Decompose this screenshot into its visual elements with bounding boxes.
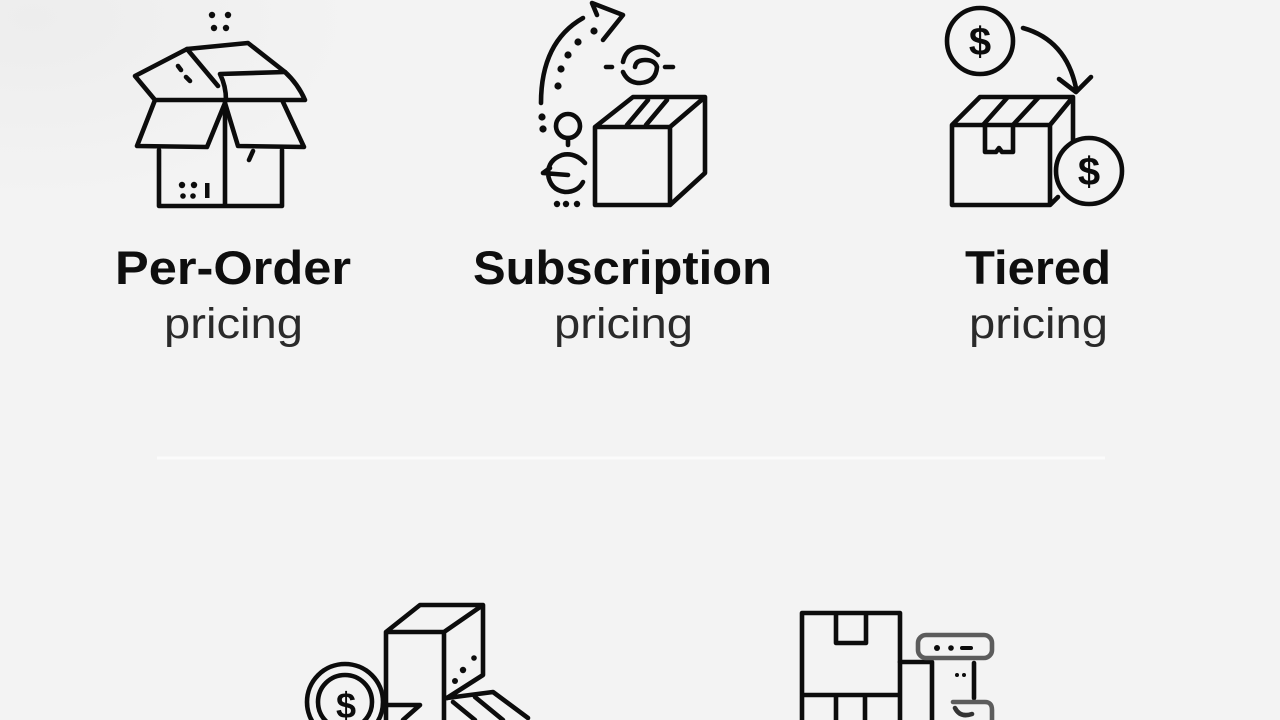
icon: box with coin (cut off) [307, 605, 528, 720]
subscription dots [538, 27, 598, 207]
heading: Per-Order pricing [115, 241, 351, 348]
heading: Subscription pricing [473, 241, 772, 348]
heading: Per-Order pricing: pricing [164, 300, 303, 348]
heading: Tiered pricing [965, 241, 1111, 348]
heading: Tiered pricing: Tiered [965, 241, 1111, 294]
heading: Subscription pricing: Subscription [473, 241, 772, 294]
icon: box with scanner (cut off) [802, 613, 992, 720]
damage dots [452, 655, 477, 684]
dollar sign: $ [1078, 150, 1100, 194]
scanner display [918, 635, 992, 658]
heading: Tiered pricing: pricing [969, 300, 1108, 348]
icon: box with recurring arrow (subscription) [538, 3, 705, 207]
dollar sign: $ [969, 20, 991, 64]
icon: open box (per-order) [135, 12, 305, 206]
icon: box with dollar coins (tiered) [947, 8, 1122, 205]
heading: Per-Order pricing: Per-Order [115, 241, 351, 294]
heading: Subscription pricing: pricing [554, 300, 693, 348]
open box dots [209, 12, 231, 31]
